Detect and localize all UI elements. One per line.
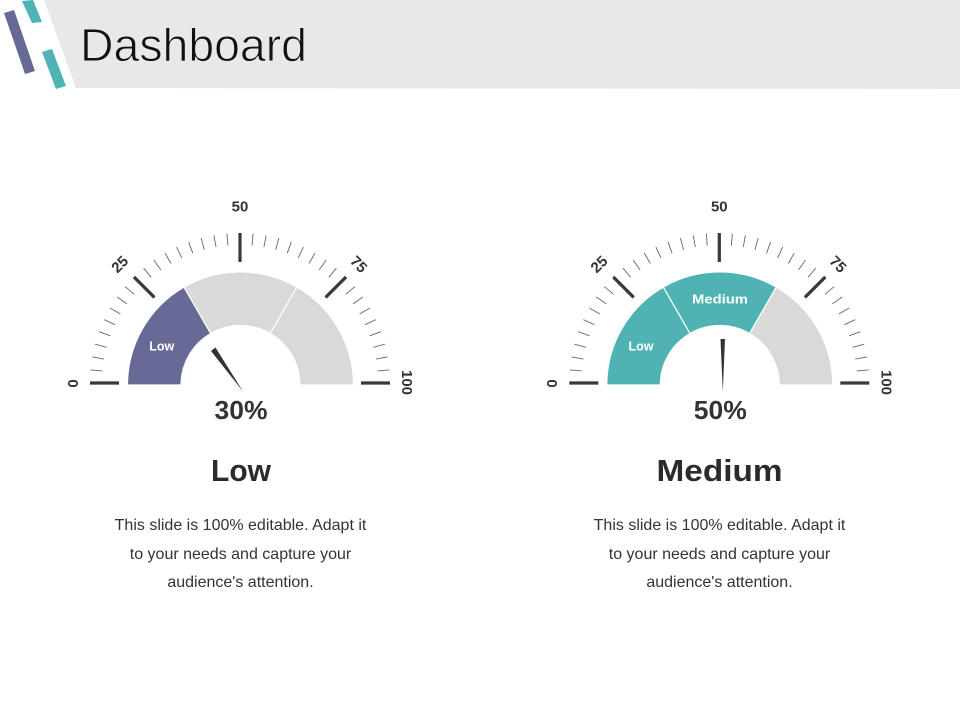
scale labels: 0 (544, 379, 561, 388)
value: 50% (694, 395, 747, 425)
segment label: Low (149, 340, 174, 354)
scale labels: 100 (398, 370, 415, 395)
description: low: This slide is 100% editable. Adapt it (115, 517, 367, 534)
description: low (115, 517, 367, 591)
scale labels: 25 (588, 253, 611, 277)
heading: medium: Medium (656, 453, 782, 488)
minor ticks (570, 234, 869, 371)
scale labels: 100 (878, 370, 894, 395)
heading: low: Low (211, 453, 272, 488)
segment label: medium: Medium (692, 292, 748, 306)
value: 30% (214, 395, 268, 425)
description: low: audience's attention. (167, 574, 314, 591)
description: medium: to your needs and capture your (609, 546, 831, 563)
scale labels: 75 (346, 253, 370, 277)
title: Dashboard (80, 19, 307, 71)
major ticks (90, 233, 390, 383)
scale labels: 50 (711, 198, 728, 216)
segment label: low: Low (628, 340, 654, 354)
needle (211, 348, 243, 392)
description: low: to your needs and capture your (130, 546, 352, 563)
minor ticks (91, 234, 389, 371)
scale labels: 75 (826, 253, 850, 277)
header band (44, 0, 960, 89)
gauge segments (607, 272, 833, 385)
scale labels: 50 (232, 198, 248, 216)
description: medium (594, 517, 846, 591)
gauge: low (65, 198, 415, 425)
gauge segments (127, 272, 354, 385)
gauge: medium (544, 198, 894, 425)
scale labels (65, 198, 415, 395)
decorative accent bars (4, 0, 66, 89)
scale labels: 0 (65, 379, 82, 388)
scale labels (544, 198, 894, 395)
description: medium: audience's attention. (646, 574, 793, 591)
scale labels: 25 (108, 253, 132, 277)
major ticks (569, 233, 869, 383)
needle (720, 339, 725, 392)
description: medium: This slide is 100% editable. Adapt it (594, 517, 846, 534)
